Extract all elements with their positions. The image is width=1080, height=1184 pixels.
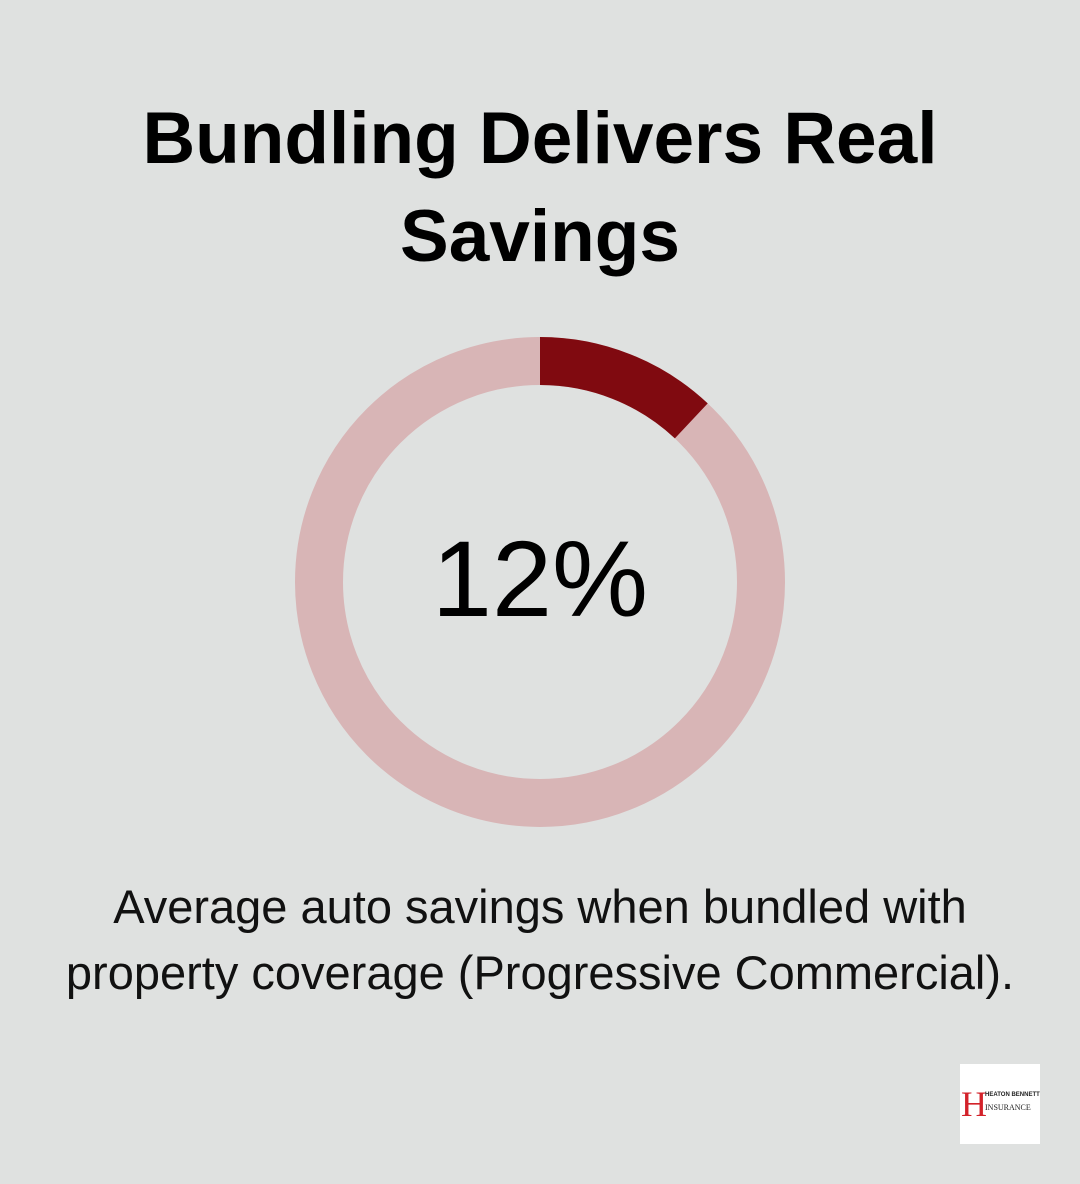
logo: H <box>961 1084 987 1124</box>
caption: property coverage (Progressive Commercial). <box>66 946 1014 999</box>
caption <box>66 880 1014 999</box>
title: Bundling Delivers Real <box>142 98 938 179</box>
logo <box>960 1064 1040 1144</box>
caption: Average auto savings when bundled with <box>113 880 967 933</box>
logo: HEATON BENNETT <box>985 1092 1040 1098</box>
title: Savings <box>400 196 680 277</box>
title <box>142 98 938 277</box>
donut chart: 12% <box>432 518 648 639</box>
logo: INSURANCE <box>985 1103 1031 1112</box>
